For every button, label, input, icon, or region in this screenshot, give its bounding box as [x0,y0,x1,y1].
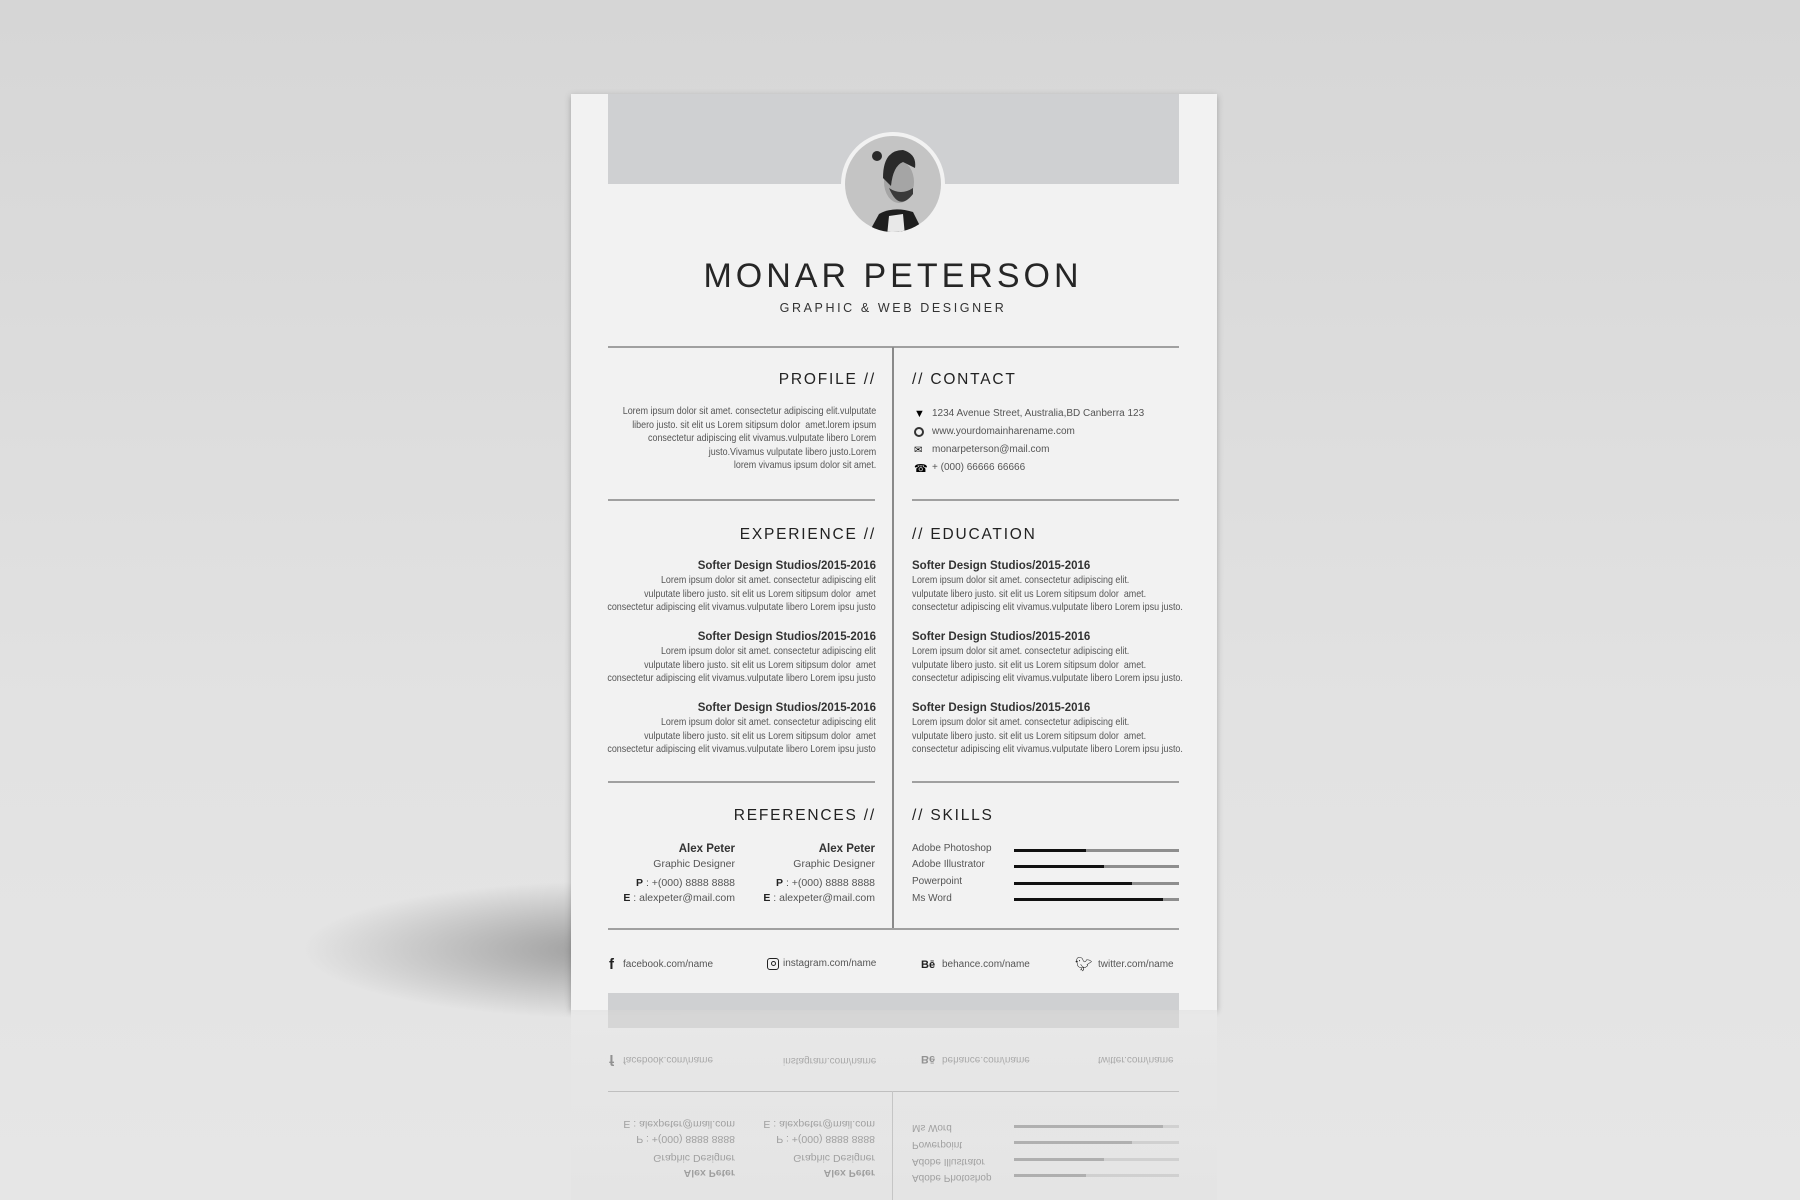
panel: profile [623,371,876,471]
contact list: ✉ [914,445,922,456]
entry 2: Softer Design Studios/2015-2016 [698,631,876,643]
social links: Bē [921,959,935,971]
social links [609,956,1174,973]
photo [841,132,945,236]
entry 3: vulputate libero justo. sit elit us Lorem sitipsum dolor amet. [912,730,1146,742]
entry 3: consectetur adipiscing elit vivamus.vulputate libero Lorem ipsu justo [608,743,876,755]
reference 2: E : alexpeter@mail.com [763,892,875,904]
skill bars: Ms Word [912,893,952,904]
entry 2: consectetur adipiscing elit vivamus.vulputate libero Lorem ipsu justo [608,672,876,684]
reflection: P : +(000) 8888 8888 [636,1133,735,1145]
social links: behance.com/name [942,959,1030,970]
profile text: lorem vivamus ipsum dolor sit amet. [734,459,876,471]
profile text: Lorem ipsum dolor sit amet. consectetur adipiscing elit.vulputate [623,405,876,417]
heading: education: // EDUCATION [912,526,1037,543]
heading: skills: // SKILLS [912,807,994,824]
entry 3 [912,702,1183,755]
contact list: + (000) 66666 66666 [932,462,1025,473]
social links: instagram.com/name [783,958,876,969]
profile text [623,405,876,471]
contact list: www.yourdomainharename.com [932,426,1075,437]
entry 1: Softer Design Studios/2015-2016 [912,560,1090,572]
reflection: facebook.com/name [623,1054,713,1065]
paper [571,94,1217,1010]
reflection: Graphic Designer [653,1152,735,1164]
contact list: 1234 Avenue Street, Australia,BD Canberra 123 [932,408,1144,419]
entry 1: vulputate libero justo. sit elit us Lorem sitipsum dolor amet [644,588,876,600]
contact list [914,408,1144,475]
panel: skills [912,807,1179,904]
reflection: Graphic Designer [793,1152,875,1164]
heading: experience: EXPERIENCE // [740,526,876,543]
skill bars: Powerpoint [912,876,962,887]
profile text: justo.Vivamus vulputate libero justo.Lorem [708,446,876,458]
reference 1 [623,843,735,904]
reflection: P : +(000) 8888 8888 [776,1133,875,1145]
entry 3: Lorem ipsum dolor sit amet. consectetur adipiscing elit [661,716,876,728]
reflection: Bē [921,1053,935,1065]
contact list: ☎ [914,463,928,475]
entry 2: Softer Design Studios/2015-2016 [912,631,1090,643]
panel: education [912,526,1183,755]
heading: contact: // CONTACT [912,371,1017,388]
reflection: instagram.com/name [783,1055,876,1066]
entry 3: Softer Design Studios/2015-2016 [698,702,876,714]
reflection: behance.com/name [942,1054,1030,1065]
profile text: libero justo. sit elit us Lorem sitipsum dolor amet.lorem ipsum [632,418,876,430]
reflection: Adobe Illustrator [912,1156,985,1167]
entry 2: Lorem ipsum dolor sit amet. consectetur adipiscing elit [661,645,876,657]
reflection: f [609,1051,614,1068]
reference 2: P : +(000) 8888 8888 [776,877,875,889]
profile text: consectetur adipiscing elit vivamus.vulputate libero Lorem [648,432,876,444]
reflection: Alex Peter [684,1167,735,1179]
social links: facebook.com/name [623,959,713,970]
social links: f [609,956,614,973]
entry 3: vulputate libero justo. sit elit us Lorem sitipsum dolor amet [644,730,876,742]
reflection: Powerpoint [912,1139,962,1150]
reflection: E : alexpeter@mail.com [763,1118,875,1130]
entry 3: Softer Design Studios/2015-2016 [912,702,1090,714]
heading: profile: PROFILE // [779,371,876,388]
panel: contact [912,371,1144,475]
entry 3: consectetur adipiscing elit vivamus.vulputate libero Lorem ipsu justo. [912,743,1183,755]
reflection: Alex Peter [824,1167,875,1179]
skill bars [912,843,1179,904]
header band [608,94,1179,184]
entry 2: vulputate libero justo. sit elit us Lorem sitipsum dolor amet [644,658,876,670]
reflection [571,1010,1217,1200]
heading: references: REFERENCES // [734,807,876,824]
title: name: MONAR PETERSON [703,257,1083,295]
reflection: Ms Word [912,1122,952,1133]
reference 1: P : +(000) 8888 8888 [636,877,735,889]
entry 2 [912,631,1183,684]
paper shadow [300,880,940,1020]
entry 2 [608,631,876,684]
contact list: ▼ [914,408,925,420]
entry 3 [608,702,876,755]
entry 1: consectetur adipiscing elit vivamus.vulputate libero Lorem ipsu justo. [912,601,1183,613]
entry 1 [912,560,1183,613]
reference 2 [763,843,875,904]
reference 1: E : alexpeter@mail.com [623,892,735,904]
entry 1: Lorem ipsum dolor sit amet. consectetur adipiscing elit [661,574,876,586]
reference 2: Alex Peter [819,843,875,855]
reflection: Adobe Photoshop [912,1172,992,1183]
entry 2: vulputate libero justo. sit elit us Lorem sitipsum dolor amet. [912,658,1146,670]
reference 1: Graphic Designer [653,858,735,870]
entry 1: vulputate libero justo. sit elit us Lorem sitipsum dolor amet. [912,588,1146,600]
entry 1 [608,560,876,613]
social links: 🐦︎ [1075,956,1093,972]
footer band [608,993,1179,1010]
panel: experience [608,526,876,755]
entry 1: Lorem ipsum dolor sit amet. consectetur adipiscing elit. [912,574,1129,586]
entry 1: Softer Design Studios/2015-2016 [698,560,876,572]
reflection: E : alexpeter@mail.com [623,1118,735,1130]
entry 2: Lorem ipsum dolor sit amet. consectetur adipiscing elit. [912,645,1129,657]
reference 1: Alex Peter [679,843,735,855]
entry 2: consectetur adipiscing elit vivamus.vulputate libero Lorem ipsu justo. [912,672,1183,684]
reflection: twitter.com/name [1098,1054,1174,1065]
skill bars: Adobe Photoshop [912,843,992,854]
subtitle: GRAPHIC & WEB DESIGNER [780,301,1006,315]
contact list: monarpeterson@mail.com [932,444,1049,455]
entry 1: consectetur adipiscing elit vivamus.vulputate libero Lorem ipsu justo [608,601,876,613]
panel: references [623,807,876,904]
social links: twitter.com/name [1098,959,1174,970]
entry 3: Lorem ipsum dolor sit amet. consectetur adipiscing elit. [912,716,1129,728]
reference 2: Graphic Designer [793,858,875,870]
skill bars: Adobe Illustrator [912,859,985,870]
